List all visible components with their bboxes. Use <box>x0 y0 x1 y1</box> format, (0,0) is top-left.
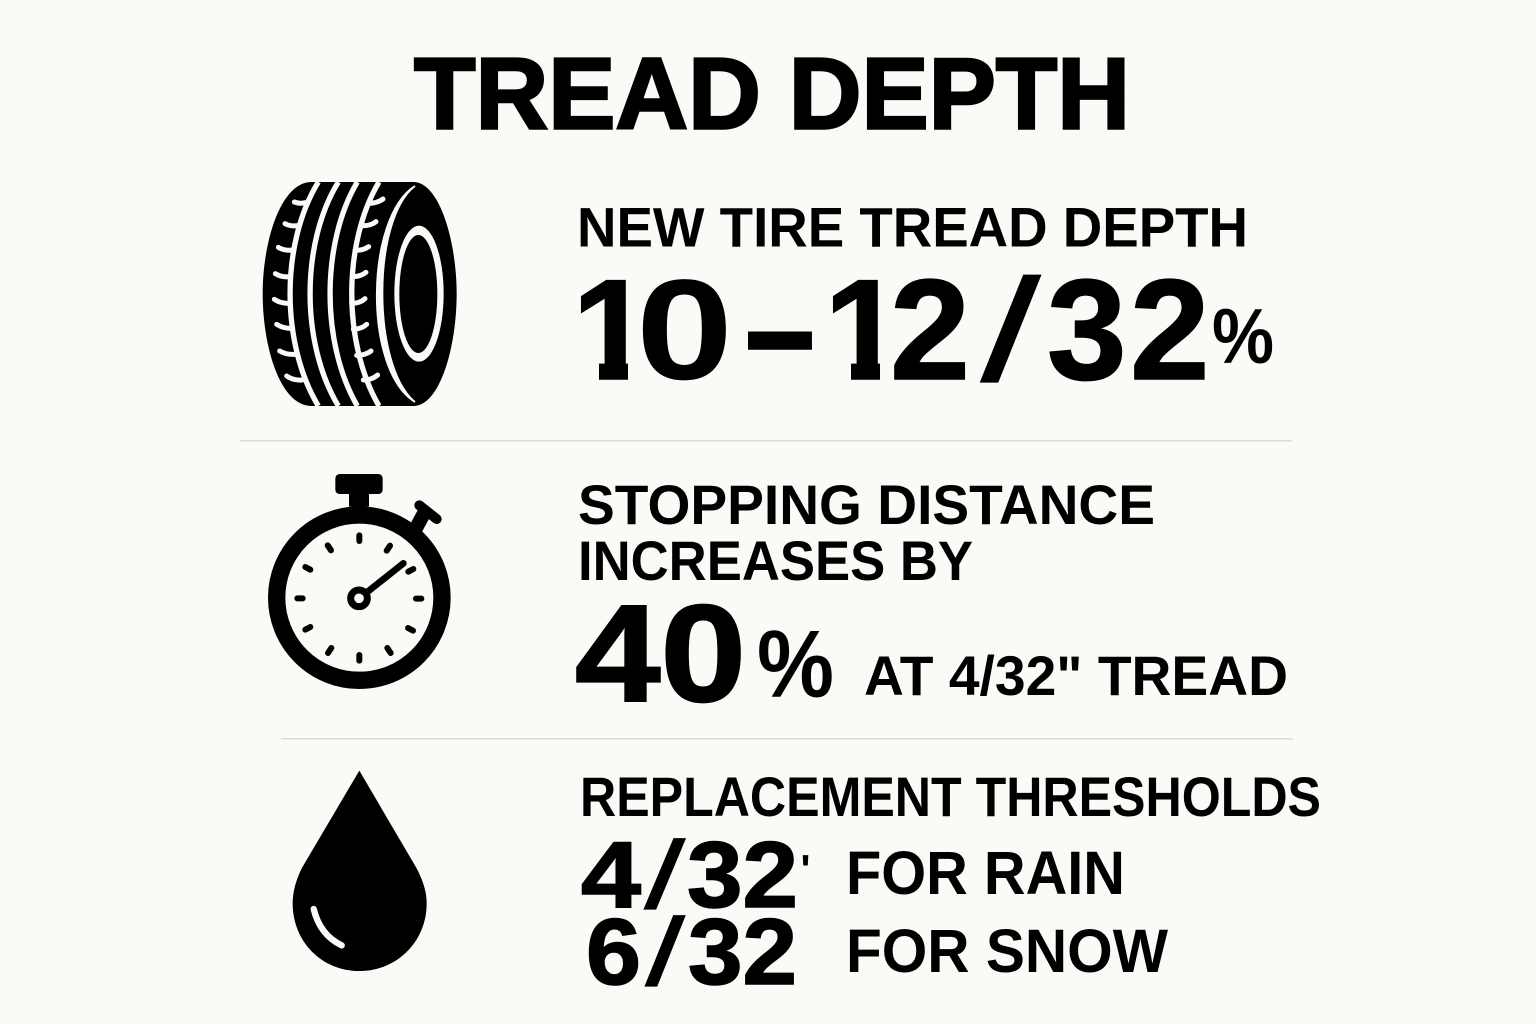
value: 4/32 for rain: ' <box>800 846 810 893</box>
value: 4/32 for rain: 4 <box>581 822 641 927</box>
value: 4/32 for rain: / <box>639 823 689 928</box>
icon: stopwatch <box>277 474 442 680</box>
value: 10–12/32: 3 <box>1047 251 1127 410</box>
icon: tire <box>263 182 457 406</box>
unit: percent: % <box>757 611 834 718</box>
value: 10–12/32: 1 <box>824 251 904 410</box>
heading: new tire tread depth: NEW TIRE TREAD DEPTH <box>577 196 1248 258</box>
label: at 4/32 tread: AT 4/32" TREAD <box>864 644 1288 707</box>
unit: percent: % <box>1212 292 1274 380</box>
value: 10–12/32 <box>572 249 1210 410</box>
value: 4/32 for rain <box>581 822 1125 928</box>
heading: stopping distance increases by: STOPPING DISTANCE <box>578 473 1155 536</box>
panel: stopping distance <box>277 473 1288 731</box>
value: 10–12/32: 0 <box>636 251 733 410</box>
value: 40: 40 <box>575 577 746 731</box>
heading: stopping distance increases by: INCREASES BY <box>578 529 973 592</box>
panel: replacement thresholds <box>293 765 1321 1005</box>
value: 6/32 for snow: / <box>641 900 689 1005</box>
title: TREAD DEPTH <box>414 38 1130 150</box>
panel: new tire tread depth <box>263 182 1274 410</box>
value: 10–12/32: 1 <box>572 251 652 410</box>
divider <box>240 440 1292 442</box>
value: 6/32 for snow: FOR SNOW <box>846 917 1168 985</box>
value: 10–12/32: – <box>746 251 814 410</box>
value: 4/32 for rain: FOR RAIN <box>846 839 1125 907</box>
heading: stopping distance increases by <box>578 473 1155 592</box>
icon: water drop <box>293 771 427 971</box>
value: 6/32 for snow: 6 <box>586 899 641 1004</box>
value: 6/32 for snow: 32 <box>688 899 797 1004</box>
value: 10–12/32: 2 <box>1130 251 1210 410</box>
value: 4/32 for rain: 32 <box>687 822 798 927</box>
value: 10–12/32: / <box>973 249 1047 410</box>
heading: replacement thresholds: REPLACEMENT THRESHOLDS <box>580 765 1321 828</box>
value: 10–12/32: 2 <box>890 251 970 410</box>
divider <box>281 738 1293 740</box>
value: 6/32 for snow <box>586 899 1168 1005</box>
